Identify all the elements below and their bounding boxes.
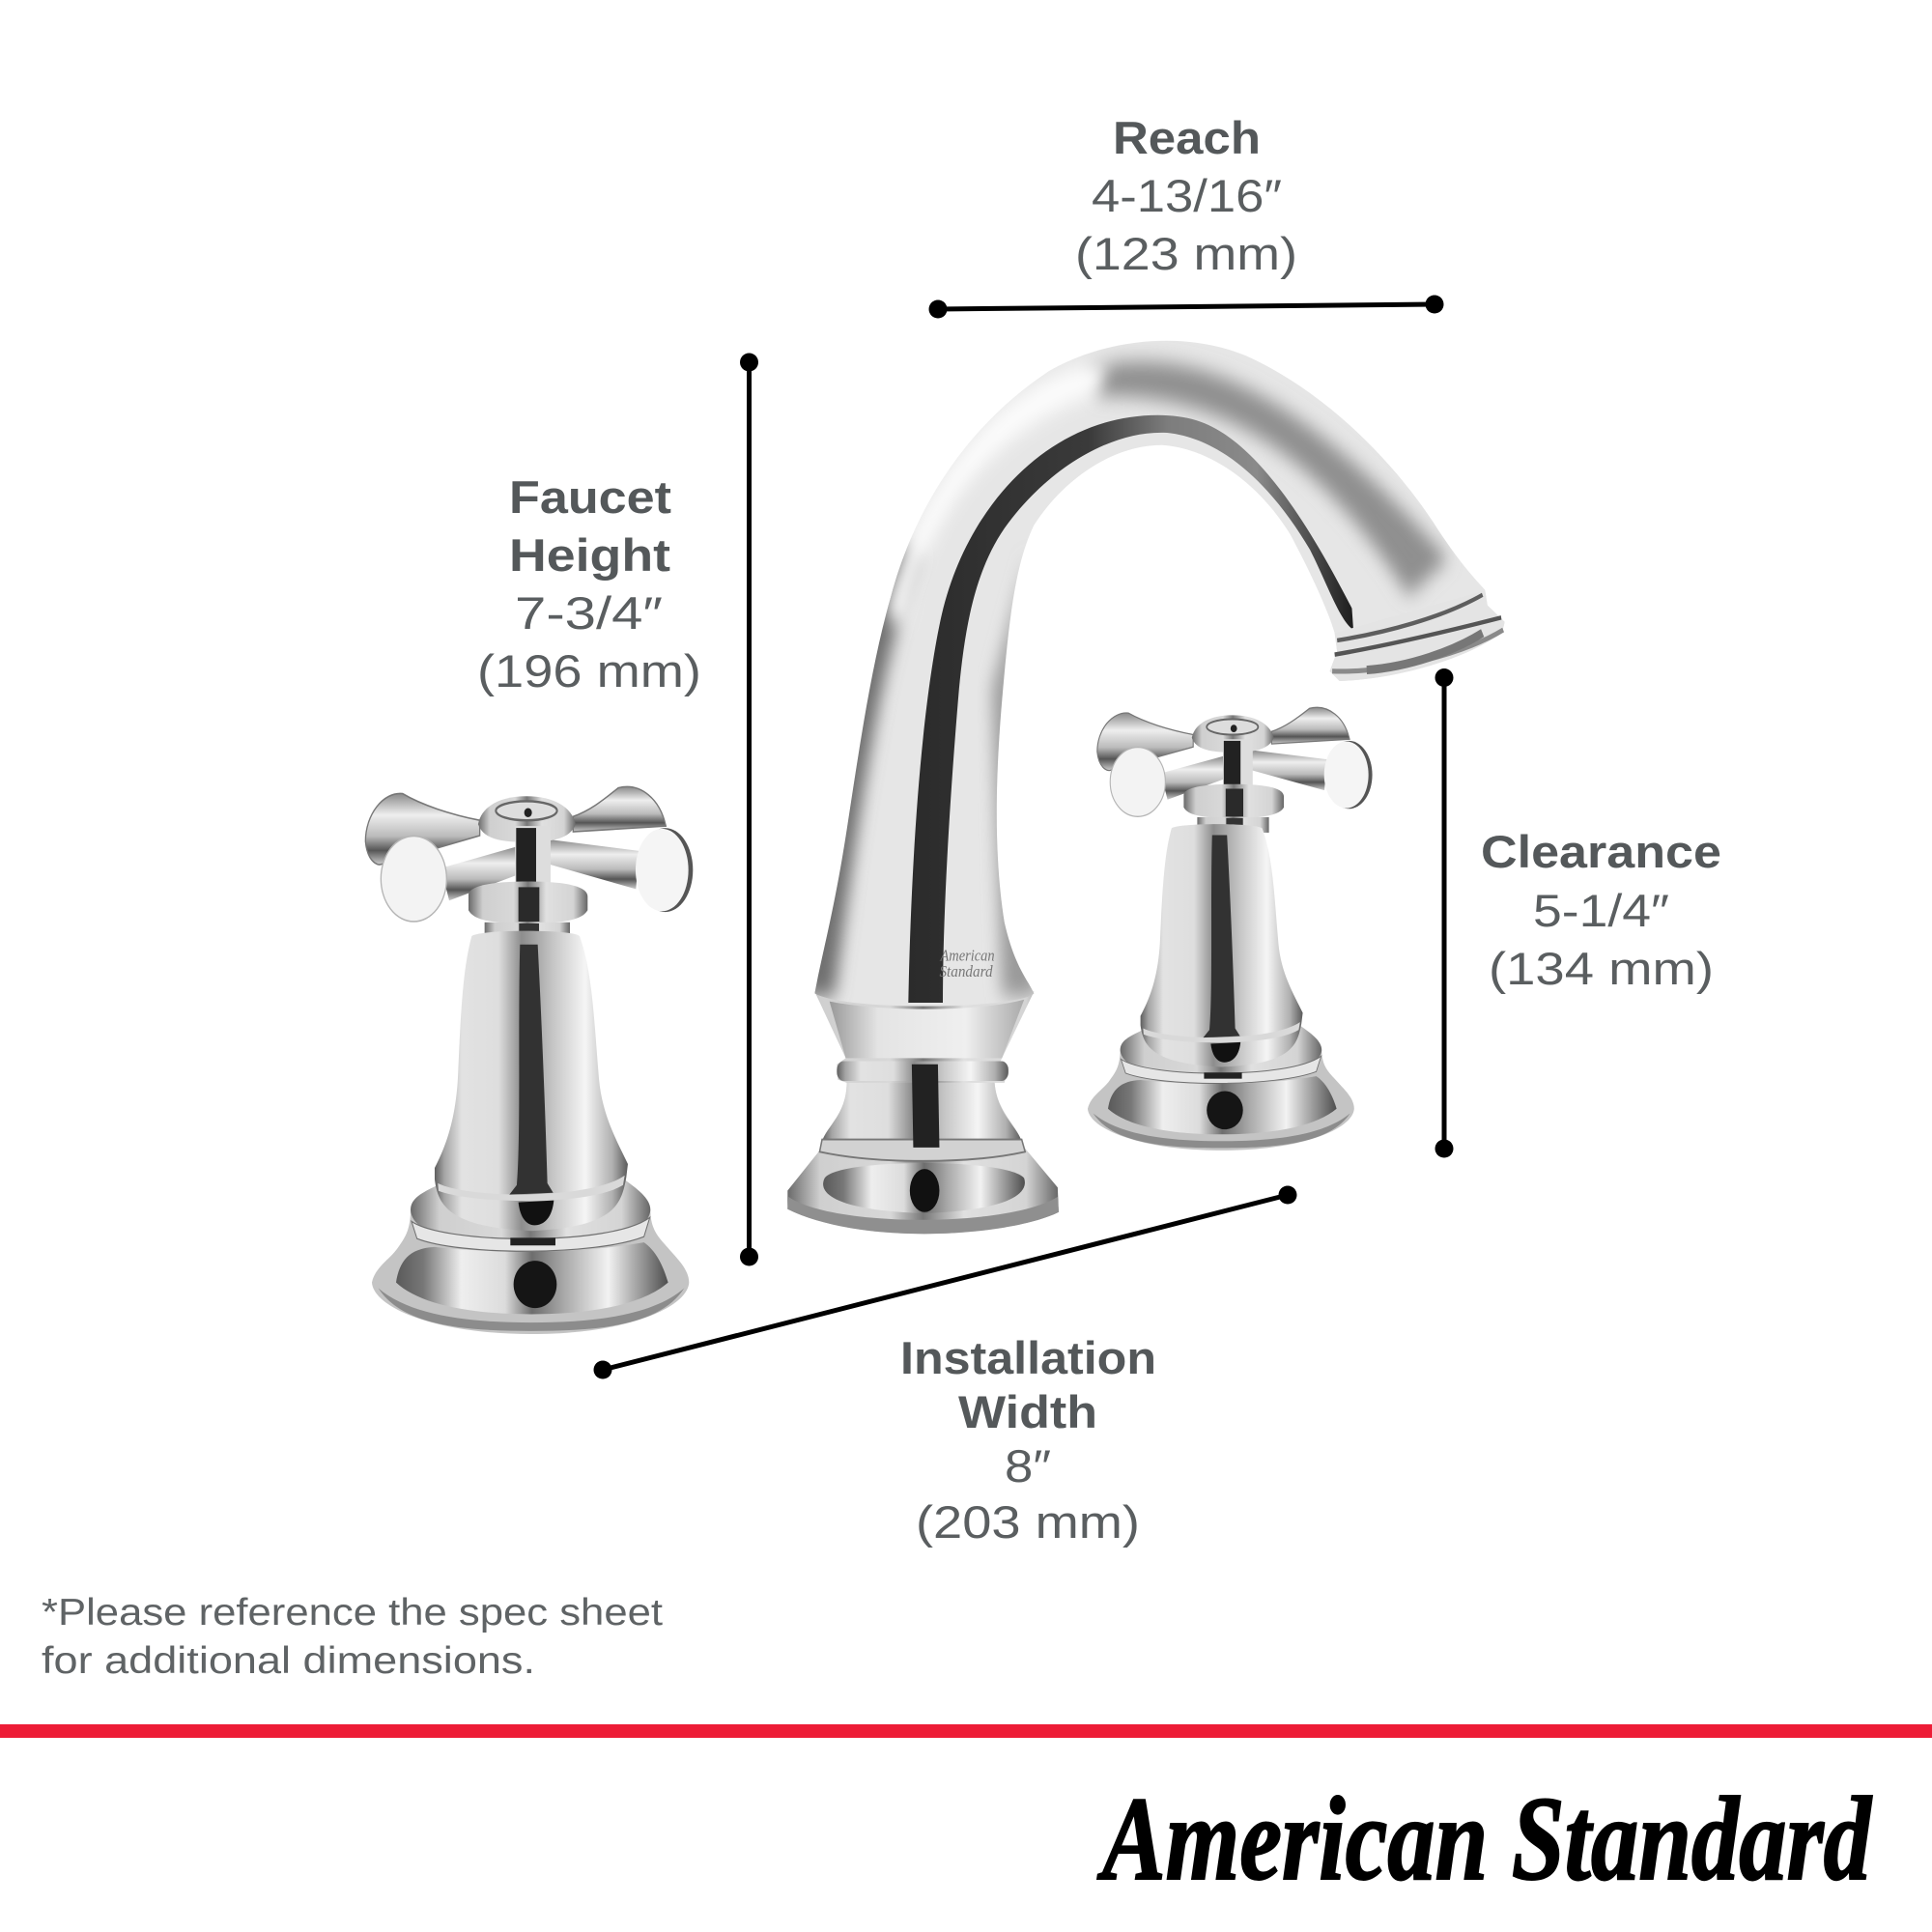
dimension line: reach xyxy=(929,296,1443,319)
label: clearance xyxy=(1481,826,1721,994)
footnote: *Please reference the spec sheet xyxy=(42,1592,663,1634)
dimension line: clearance xyxy=(1435,668,1453,1157)
spout nozzle xyxy=(1332,595,1503,671)
spout body xyxy=(803,319,1517,1015)
footnote xyxy=(42,1592,663,1682)
label: faucet height: (196 mm) xyxy=(477,645,701,696)
footnote: for additional dimensions. xyxy=(42,1640,535,1682)
faucet spout: Standard xyxy=(939,964,993,981)
label: reach: 4-13/16″ xyxy=(1092,170,1282,221)
label: reach xyxy=(1075,112,1297,279)
faucet spout xyxy=(787,319,1517,1234)
label: installation width: (203 mm) xyxy=(916,1496,1140,1548)
label: faucet height: 7-3/4″ xyxy=(515,587,663,639)
red divider bar xyxy=(0,1724,1932,1738)
label: faucet height xyxy=(477,471,701,696)
dimension line: installation width xyxy=(593,1186,1296,1379)
label: faucet height: Faucet xyxy=(509,471,671,523)
label: reach: (123 mm) xyxy=(1075,228,1297,279)
label: clearance: Clearance xyxy=(1481,826,1721,877)
label: clearance: 5-1/4″ xyxy=(1533,885,1669,936)
left handle xyxy=(365,786,693,1334)
small logo on spout: American xyxy=(940,948,995,965)
label: installation width xyxy=(900,1332,1156,1548)
label: faucet height: Height xyxy=(509,529,670,581)
right handle xyxy=(1088,707,1373,1151)
spout base xyxy=(787,991,1059,1234)
label: installation width: 8″ xyxy=(1005,1440,1051,1492)
dimension line: faucet height xyxy=(740,354,758,1265)
label: clearance: (134 mm) xyxy=(1489,943,1714,994)
label: reach: Reach xyxy=(1113,112,1261,163)
label: installation width: Installation xyxy=(900,1332,1156,1383)
label: installation width: Width xyxy=(958,1386,1097,1437)
